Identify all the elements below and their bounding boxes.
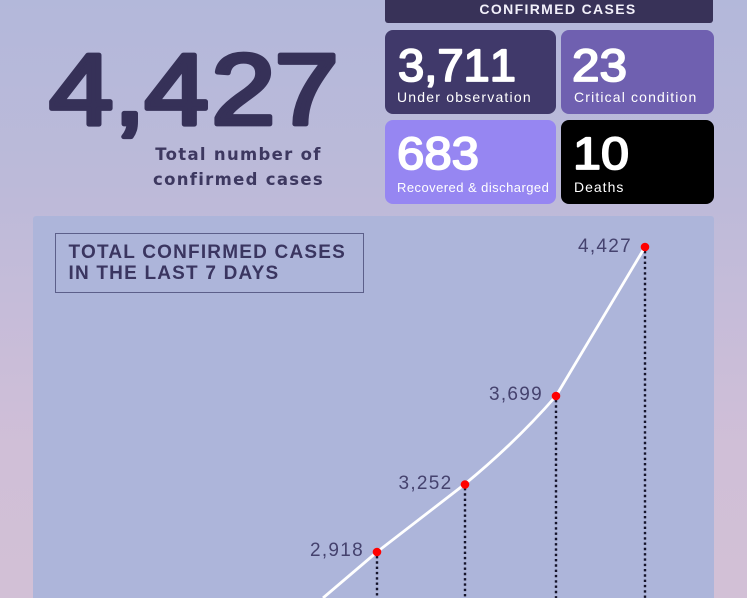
banner: confirmed cases: CONFIRMED CASES: [479, 1, 637, 17]
data labels: [310, 236, 632, 561]
headline caption: Total number of: [155, 145, 322, 164]
tile: deaths: [561, 120, 714, 204]
tile: deaths: 10: [573, 128, 629, 179]
panel: 7-day line chart: [33, 216, 714, 598]
tile: under observation: Under observation: [397, 89, 532, 105]
headline number: total confirmed cases: 4,427: [49, 33, 339, 145]
tile: recovered and discharged: 683: [397, 128, 479, 179]
data labels: 4,427: [578, 236, 632, 257]
chart title box: TOTAL CONFIRMED CASES: [68, 242, 346, 263]
dotted drop lines: [377, 251, 645, 598]
tile: recovered and discharged: Recovered & discharged: [397, 180, 549, 195]
tile: critical condition: Critical condition: [574, 89, 697, 105]
data points: [373, 243, 649, 556]
trend line: [323, 247, 645, 598]
tile: deaths: Deaths: [574, 179, 624, 195]
data labels: 2,918: [310, 540, 364, 561]
data labels: 3,252: [398, 473, 452, 494]
tile: recovered and discharged: [385, 120, 556, 204]
tile: under observation: [385, 30, 556, 114]
headline caption: [153, 145, 324, 189]
headline caption: confirmed cases: [153, 170, 324, 189]
banner: confirmed cases: [385, 0, 713, 23]
tile: critical condition: 23: [572, 40, 627, 91]
chart title box: [55, 233, 364, 293]
tile: critical condition: [561, 30, 714, 114]
chart title box: IN THE LAST 7 DAYS: [68, 263, 279, 284]
tile: under observation: 3,711: [398, 40, 516, 91]
data labels: 3,699: [489, 384, 543, 405]
